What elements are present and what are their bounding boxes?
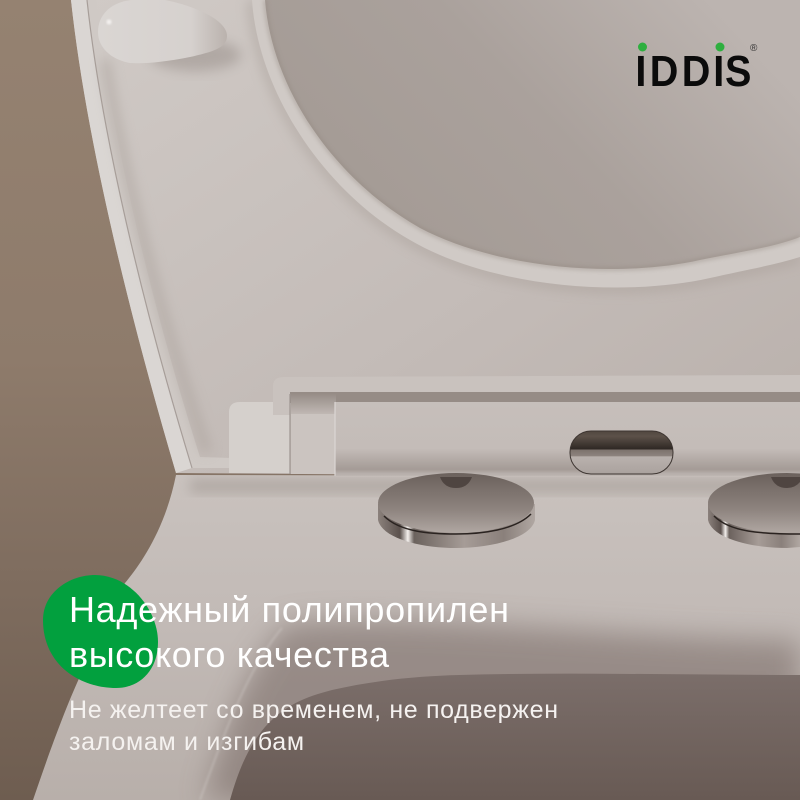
chrome disc right xyxy=(708,473,800,548)
shadows under hinge xyxy=(190,479,800,493)
green blob xyxy=(43,575,158,688)
chrome button xyxy=(570,431,673,474)
chrome disc left xyxy=(378,473,535,548)
bumper xyxy=(98,0,241,71)
heading: высокого качества xyxy=(69,634,390,675)
seat opening xyxy=(252,0,800,288)
logo: IDDIS: ® xyxy=(750,43,758,54)
logo: IDDIS: IDDIS xyxy=(635,46,751,95)
subtext: заломам и изгибам xyxy=(69,728,304,756)
toilet seat lid xyxy=(71,0,800,478)
hinge bar xyxy=(229,375,800,477)
heading: Надежный полипропилен xyxy=(69,589,509,630)
toilet rim and bowl xyxy=(33,475,800,800)
subtext: Не желтеет со временем, не подвержен xyxy=(69,696,558,724)
